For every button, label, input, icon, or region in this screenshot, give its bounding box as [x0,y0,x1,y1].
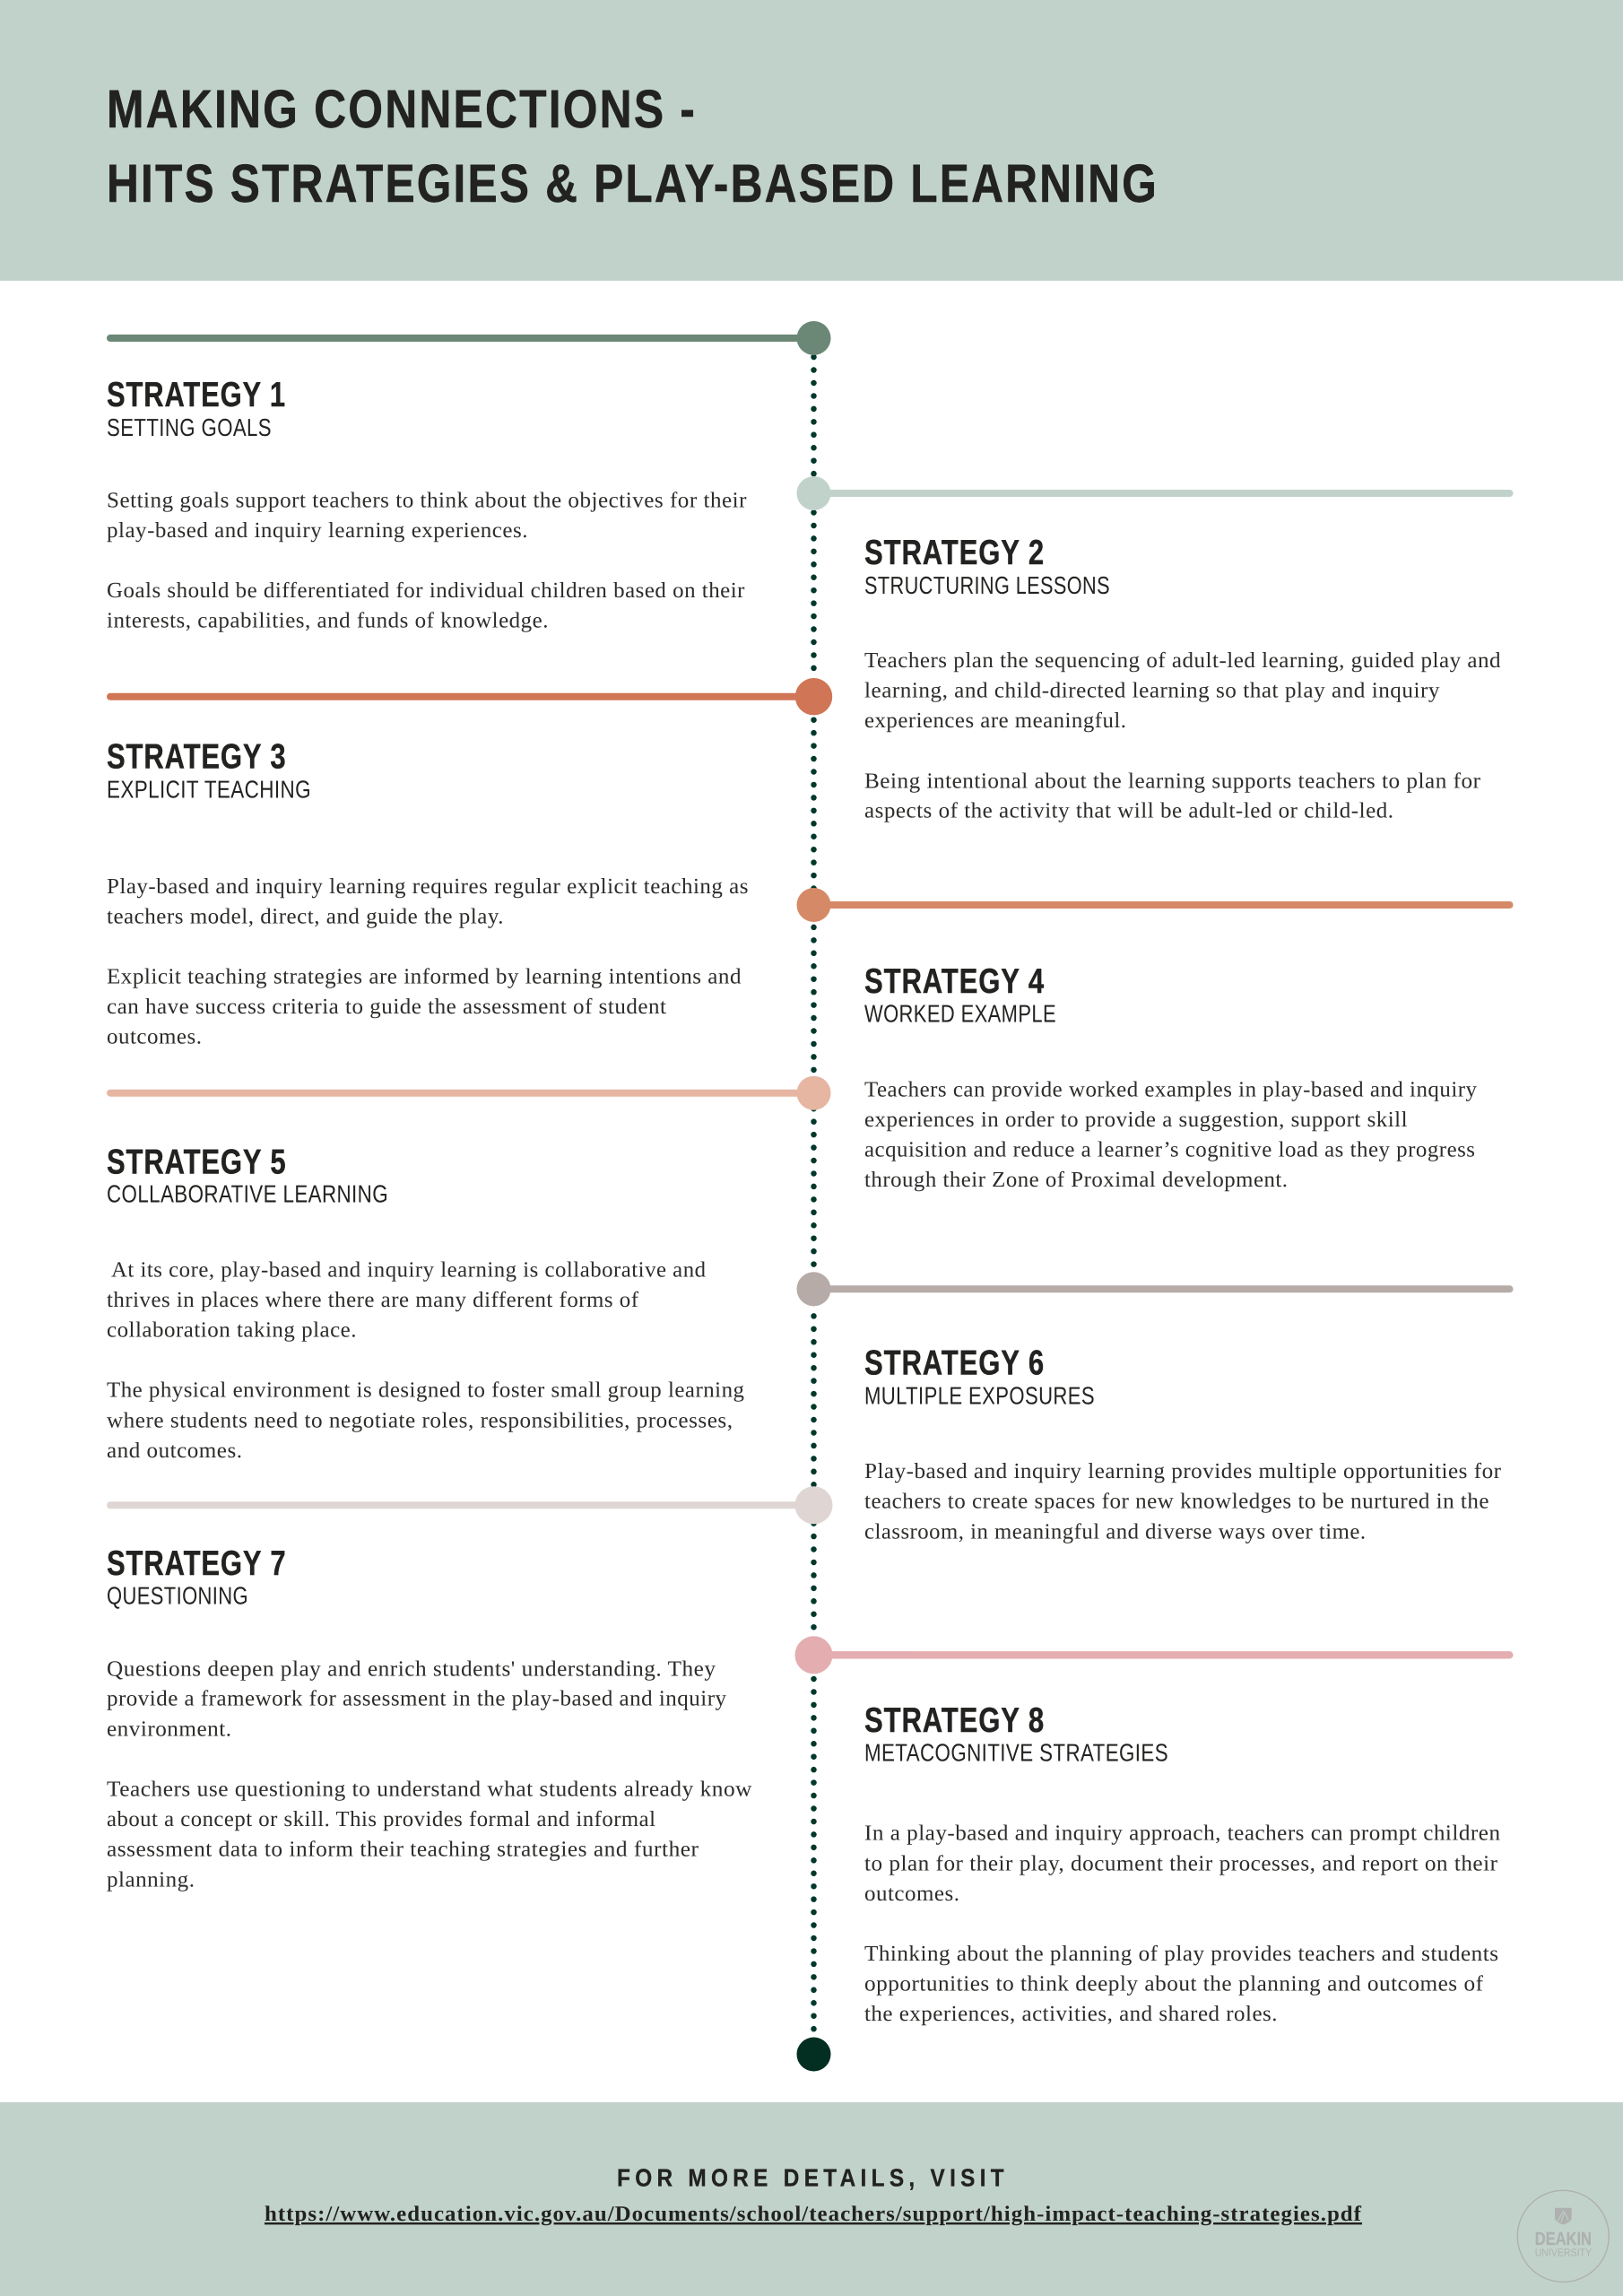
body text: strategy 5: The physical environment is designed to foster small group learning [107,1378,744,1403]
connector and node 6 [796,1272,1514,1306]
connector and node 4 [796,888,1514,922]
connector and node 8 [794,1636,1514,1674]
panel: title header [0,0,1623,281]
body text: strategy 4: acquisition and reduce a learner’s cognitive load as they progress [864,1137,1476,1161]
body text: strategy 4: experiences in order to provide a suggestion, support skill [864,1108,1408,1132]
title [107,79,1159,213]
panel: footer [0,2102,1623,2296]
heading: strategy 8: STRATEGY 8 [864,1701,1045,1740]
subheading: worked example: WORKED EXAMPLE [864,999,1056,1027]
body text: strategy 7: provide a framework for assessment in the play-based and inquiry [107,1687,727,1711]
body text: strategy 7: planning. [107,1867,195,1892]
body text: strategy 5 [107,1257,744,1463]
panel: strategy 8 [794,1636,1514,2026]
wordmark: DEAKIN [1535,2229,1592,2249]
body text: strategy 2 [864,648,1501,823]
heading: strategy 6: STRATEGY 6 [864,1344,1045,1383]
connector and node 2 [796,476,1514,510]
body text: strategy 5: where students need to negotiate roles, responsibilities, processes, [107,1408,733,1432]
body text: strategy 4: Teachers can provide worked examples in play-based and inquiry [864,1077,1478,1101]
body text: strategy 8: outcomes. [864,1882,959,1906]
dotted timeline spine [811,344,817,2054]
subheading: collaborative learning: COLLABORATIVE LEARNING [107,1180,388,1208]
body text: strategy 7: Questions deepen play and enrich students' understanding. They [107,1657,716,1681]
body text: strategy 7: about a concept or skill. This provides formal and informal [107,1807,656,1831]
subheading: setting goals: SETTING GOALS [107,413,272,441]
body text: strategy 1: Setting goals support teachers to think about the objectives for their [107,489,747,513]
panel: strategy 6 [796,1272,1514,1544]
footer link: https://www.education.vic.gov.au/Documents/school/teachers/support/high-impact-teaching-strategies.pdf [265,2203,1362,2226]
body text: strategy 8: the experiences, activities, and shared roles. [864,2002,1278,2026]
body text: strategy 4 [864,1077,1478,1192]
body text: strategy 3: can have success criteria to guide the assessment of student [107,995,667,1019]
body text: strategy 3: Play-based and inquiry learning requires regular explicit teaching as [107,874,749,899]
subheading: questioning: QUESTIONING [107,1582,248,1610]
body text: strategy 7: Teachers use questioning to understand what students already know [107,1777,752,1801]
heading: strategy 3: STRATEGY 3 [107,738,287,777]
body text: strategy 6: teachers to create spaces for new knowledges to be nurtured in the [864,1490,1489,1514]
heading: strategy 2: STRATEGY 2 [864,534,1045,572]
body text: strategy 3: outcomes. [107,1024,203,1048]
body text: strategy 1 [107,489,747,633]
body text: strategy 5: At its core, play-based and inquiry learning is collaborative and [111,1257,707,1282]
body text: strategy 4: through their Zone of Proximal development. [864,1168,1288,1192]
body text: strategy 5: thrives in places where there are many different forms of [107,1288,639,1312]
body text: strategy 1: interests, capabilities, and funds of knowledge. [107,608,549,633]
connector and node 3 [107,678,832,715]
connector and node 1 [107,321,830,355]
body text: strategy 8: In a play-based and inquiry approach, teachers can prompt children [864,1822,1501,1846]
panel: strategy 4 [796,888,1514,1192]
body text: strategy 2: Being intentional about the learning supports teachers to plan for [864,769,1481,793]
body text: strategy 6: classroom, in meaningful and diverse ways over time. [864,1519,1367,1544]
body text: strategy 7: assessment data to inform their teaching strategies and further [107,1837,699,1861]
body text: strategy 7 [107,1657,752,1892]
logo: Deakin University [1517,2190,1609,2282]
panel: strategy 1 [107,321,830,633]
body text: strategy 2: aspects of the activity that will be adult-led or child-led. [864,799,1393,823]
body text: strategy 1: Goals should be differentiated for individual children based on their [107,578,745,603]
heading: strategy 1: STRATEGY 1 [107,376,286,414]
wordmark [1535,2229,1592,2258]
heading: strategy 4: STRATEGY 4 [864,962,1045,1001]
body text: strategy 8 [864,1822,1501,2026]
body text: strategy 8: Thinking about the planning of play provides teachers and students [864,1942,1499,1966]
subheading: metacognitive strategies: METACOGNITIVE STRATEGIES [864,1739,1168,1767]
body text: strategy 8: to plan for their play, document their processes, and report on their [864,1851,1497,1875]
body text: strategy 5: collaboration taking place. [107,1318,357,1343]
heading: strategy 7: STRATEGY 7 [107,1544,287,1583]
body text: strategy 8: opportunities to think deeply about the planning and outcomes of [864,1971,1484,1996]
body text: strategy 6 [864,1459,1501,1544]
title: HITS STRATEGIES & PLAY-BASED LEARNING [107,153,1159,213]
subheading: multiple exposures: MULTIPLE EXPOSURES [864,1381,1095,1409]
heading: strategy 5: STRATEGY 5 [107,1143,287,1181]
body text: strategy 3 [107,874,749,1048]
body text: strategy 3: teachers model, direct, and guide the play. [107,904,504,928]
connector and node 5 [107,1076,830,1110]
body text: strategy 2: learning, and child-directed learning so that play and inquiry [864,679,1440,703]
body text: strategy 6: Play-based and inquiry learning provides multiple opportunities for [864,1459,1501,1483]
title: MAKING CONNECTIONS - [107,79,697,139]
panel: strategy 3 [107,678,832,1048]
body text: strategy 2: Teachers plan the sequencing of adult-led learning, guided play and [864,648,1501,673]
subheading: explicit teaching: EXPLICIT TEACHING [107,775,311,803]
body text: strategy 3: Explicit teaching strategies are informed by learning intentions and [107,965,742,989]
wordmark: UNIVERSITY [1535,2246,1592,2258]
body text: strategy 5: and outcomes. [107,1439,242,1463]
subheading: structuring lessons: STRUCTURING LESSONS [864,571,1110,599]
body text: strategy 7: environment. [107,1717,231,1741]
body text: strategy 1: play-based and inquiry learning experiences. [107,518,528,543]
panel: strategy 7 [107,1486,832,1892]
panel: strategy 5 [107,1076,830,1463]
connector and node 7 [107,1486,832,1524]
footer heading: FOR MORE DETAILS, VISIT [617,2164,1009,2192]
icon: shield [1555,2208,1572,2224]
timeline end node [796,2038,830,2072]
panel: strategy 2 [796,476,1514,823]
body text: strategy 2: experiences are meaningful. [864,709,1126,733]
